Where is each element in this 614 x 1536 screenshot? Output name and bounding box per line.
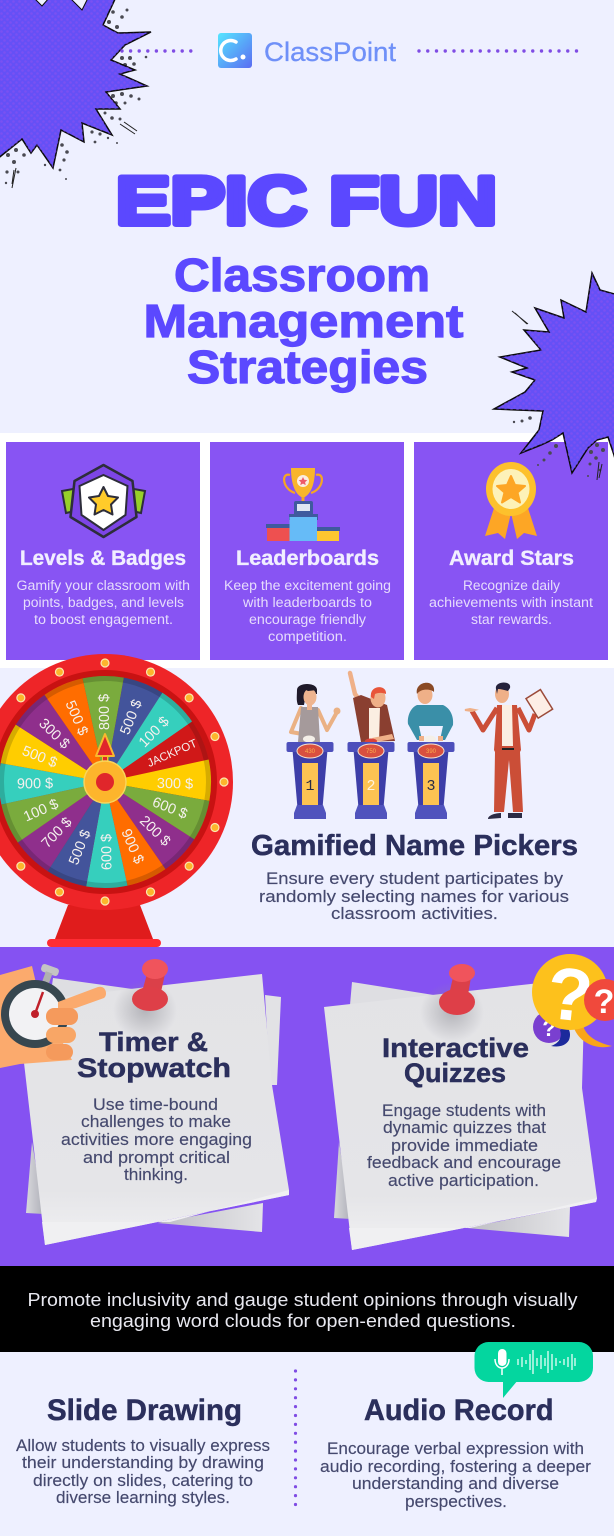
brand name: ClassPoint xyxy=(264,37,397,67)
heading: Levels & Badges xyxy=(20,547,186,570)
heading: Audio Record xyxy=(364,1394,554,1427)
text block: to boost engagement. xyxy=(34,612,173,627)
text block: active participation. xyxy=(388,1171,539,1190)
text block: points, badges, and levels xyxy=(23,595,184,610)
text block: provide immediate xyxy=(391,1136,538,1155)
illustration: game show contestants xyxy=(286,673,553,819)
text block: Gamify your classroom with xyxy=(16,578,190,593)
text block xyxy=(367,1101,561,1190)
wheel labels: 100 $ xyxy=(136,714,173,751)
text block: gamified name pickers xyxy=(259,869,569,923)
text block xyxy=(16,1436,270,1507)
burst: right xyxy=(494,273,614,480)
text block: competition. xyxy=(268,629,347,644)
text block: Encourage verbal expression with xyxy=(327,1439,584,1458)
divider: dotted vertical xyxy=(294,1371,297,1508)
icon: question bubbles: ? xyxy=(542,1016,556,1041)
wheel labels: 500 $ xyxy=(117,697,146,737)
text block: and prompt critical xyxy=(83,1148,230,1167)
subtitle: Strategies xyxy=(187,341,428,393)
text block xyxy=(61,1095,252,1184)
panel: timer note xyxy=(0,959,289,1245)
text block: audio recording, fostering a deeper xyxy=(320,1457,591,1476)
title: EPIC FUN xyxy=(116,163,497,239)
contestant three xyxy=(408,683,453,742)
wheel labels xyxy=(17,694,199,870)
text block: Use time-bound xyxy=(93,1095,218,1114)
wheel labels: 900 $ xyxy=(17,776,53,793)
podium one xyxy=(286,742,334,819)
text block: perspectives. xyxy=(405,1492,507,1511)
text block: thinking. xyxy=(124,1165,188,1184)
text block: gamified name pickers: randomly selecting names for various xyxy=(259,887,569,906)
burst: top left xyxy=(0,0,151,188)
contestant one xyxy=(291,684,340,742)
text block: Engage students with xyxy=(382,1101,546,1120)
wheel of fortune xyxy=(0,654,233,947)
panel: audio record xyxy=(320,1394,591,1511)
text block: dynamic quizzes that xyxy=(383,1118,546,1137)
podium three: 3 xyxy=(426,778,436,795)
note sheet xyxy=(324,978,597,1250)
text block: directly on slides, catering to xyxy=(33,1471,253,1490)
text block xyxy=(16,578,190,627)
wheel bulbs xyxy=(0,659,228,905)
podium two: 750 xyxy=(366,749,377,755)
heading: gamified name pickers: Gamified Name Pickers xyxy=(251,830,578,862)
heading xyxy=(382,1033,529,1088)
text block: Allow students to visually express xyxy=(16,1436,270,1455)
presenter xyxy=(465,682,553,819)
heading: Slide Drawing xyxy=(47,1394,242,1427)
heading: Stopwatch xyxy=(77,1053,231,1083)
text block: engaging word clouds for open-ended questions. xyxy=(90,1310,516,1331)
heading: Interactive xyxy=(382,1033,529,1063)
heading: Timer & xyxy=(99,1027,208,1057)
text block: star rewards. xyxy=(471,612,552,627)
text block: encourage friendly xyxy=(249,612,366,627)
text block: activities more engaging xyxy=(61,1130,252,1149)
purple band xyxy=(0,947,614,1266)
dotted line left xyxy=(122,49,192,53)
note back sheet xyxy=(334,982,570,1237)
icon: audio speech bubble xyxy=(474,1342,593,1398)
wheel labels: 500 $ xyxy=(66,828,94,867)
wheel labels: 500 $ xyxy=(20,743,59,771)
text block: challenges to make xyxy=(81,1112,231,1131)
text block: gamified name pickers: classroom activities. xyxy=(331,904,498,923)
note curl xyxy=(42,1190,289,1245)
panel: quizzes note xyxy=(324,951,614,1250)
podium one: 430 xyxy=(305,749,316,755)
wheel labels: 700 $ xyxy=(39,814,75,852)
white band behind cards xyxy=(0,433,614,668)
wheel pointer xyxy=(96,734,114,762)
wheel hub xyxy=(84,761,126,803)
dotted line right xyxy=(419,49,578,53)
panel: slide drawing xyxy=(16,1394,270,1507)
text block: gamified name pickers: Ensure every student participates by xyxy=(266,869,564,888)
text block: Promote inclusivity and gauge student opinions through visually xyxy=(28,1289,578,1310)
icon: trophy on podium xyxy=(266,468,340,541)
wheel labels: 500 $ xyxy=(62,698,91,738)
subtitle: Classroom xyxy=(174,249,430,301)
wheel labels: JACKPOT xyxy=(146,738,199,770)
heading xyxy=(77,1027,231,1083)
text block xyxy=(224,578,391,644)
wheel labels: 600 $ xyxy=(99,834,116,870)
icon: question bubbles xyxy=(532,951,614,1047)
icon: question bubbles: ? xyxy=(594,983,614,1021)
icon: badge xyxy=(62,465,145,537)
heading: Quizzes xyxy=(404,1058,506,1088)
wheel segments xyxy=(0,676,211,888)
icon: question bubbles: ? xyxy=(543,951,597,1038)
panel: leaderboards xyxy=(210,442,404,660)
text block: Keep the excitement going xyxy=(224,578,391,593)
panel: award stars xyxy=(414,442,608,660)
podium three xyxy=(408,742,454,819)
text block: understanding and diverse xyxy=(352,1474,559,1493)
note sheet xyxy=(17,974,289,1245)
note curl xyxy=(349,1198,597,1250)
heading: Award Stars xyxy=(449,547,574,570)
podium two xyxy=(348,742,394,819)
text block xyxy=(28,1289,578,1331)
icon: hand with stopwatch xyxy=(0,963,106,1068)
heading: Leaderboards xyxy=(236,547,379,570)
wheel stand xyxy=(47,905,161,947)
note back sheet xyxy=(26,978,281,1232)
podium one: 1 xyxy=(305,778,315,795)
text block: with leaderboards to xyxy=(242,595,372,610)
panel: levels and badges xyxy=(6,442,200,660)
subtitle xyxy=(144,249,464,393)
podium three: 390 xyxy=(426,749,437,755)
text block: achievements with instant xyxy=(429,595,593,610)
text block: Recognize daily xyxy=(463,578,560,593)
logo xyxy=(122,33,578,68)
icon: push pin xyxy=(420,964,484,1042)
wheel labels: 200 $ xyxy=(136,813,173,850)
subtitle: Management xyxy=(144,295,464,347)
wheel labels: 300 $ xyxy=(35,716,73,752)
wheel labels: 100 $ xyxy=(21,796,61,825)
wheel labels: 300 $ xyxy=(157,776,193,793)
text block xyxy=(429,578,593,627)
wheel labels: 900 $ xyxy=(117,827,147,866)
text block: diverse learning styles. xyxy=(56,1488,230,1507)
podium two: 2 xyxy=(366,778,376,795)
text block xyxy=(320,1439,591,1511)
wheel labels: 600 $ xyxy=(150,794,190,823)
icon: medal xyxy=(485,462,537,539)
text block: their understanding by drawing xyxy=(22,1453,264,1472)
wheel labels: 800 $ xyxy=(96,694,113,730)
text block: feedback and encourage xyxy=(367,1153,561,1172)
contestant two xyxy=(350,673,395,744)
panel: word clouds xyxy=(0,1266,614,1352)
icon: push pin xyxy=(113,959,177,1040)
icon: classpoint xyxy=(218,33,252,68)
